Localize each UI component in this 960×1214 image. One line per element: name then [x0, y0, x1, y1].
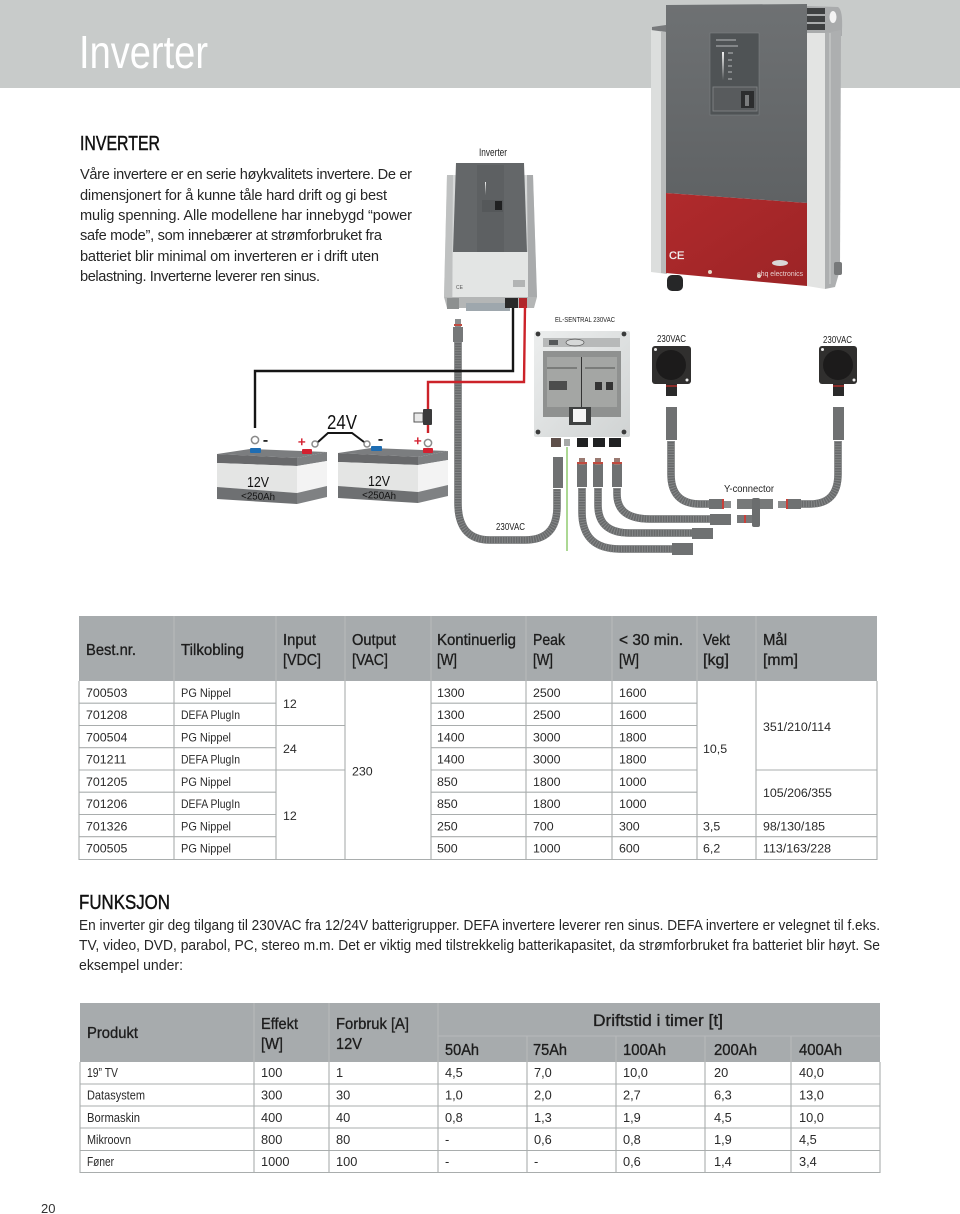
table values: 1800	[533, 797, 561, 811]
socket left	[652, 333, 691, 396]
table values: -	[445, 1154, 449, 1169]
header labels: Output	[352, 632, 397, 649]
header labels: [W]	[437, 652, 457, 669]
header labels: Best.nr.	[86, 642, 136, 659]
table values: 4,5	[714, 1110, 732, 1125]
socket right	[819, 334, 857, 396]
table values: 10,0	[799, 1110, 824, 1125]
table values: PG Nippel	[181, 820, 231, 834]
table values: 80	[336, 1132, 350, 1147]
table values: 100	[336, 1154, 357, 1169]
brand name: ehq electronics	[757, 269, 803, 278]
table values: 1800	[533, 775, 561, 789]
table values: 20	[714, 1065, 728, 1080]
table values: 400	[261, 1110, 282, 1125]
heading: INVERTER: INVERTER	[80, 133, 160, 155]
cable gland	[667, 275, 683, 291]
table values: 30	[336, 1088, 350, 1102]
table values: 600	[619, 842, 640, 856]
table values: 230	[352, 764, 373, 778]
header labels	[86, 631, 798, 669]
title: Inverter	[79, 26, 208, 78]
table values: 2500	[533, 686, 561, 700]
battery 1: -	[263, 432, 268, 449]
grid lines	[80, 1003, 880, 1173]
table values: 300	[261, 1088, 282, 1102]
header labels: Input	[283, 632, 317, 649]
vent grille	[807, 8, 825, 30]
label: 230VAC cable: 230VAC	[496, 521, 525, 533]
function text: En inverter gir deg tilgang til 230VAC fra 12/24V batterigrupper. DEFA invertere leverer ren sinus. DEFA invertere er velegnet til f.eks.	[79, 918, 880, 934]
intro text: batteriet blir minimal om inverteren er i drift uten	[80, 249, 379, 265]
intro text: dimensjonert for å kunne tåle hard drift og gi best	[80, 188, 387, 204]
header labels: Mål	[763, 631, 787, 649]
table values: DEFA PlugIn	[181, 797, 240, 811]
table values: 4,5	[799, 1132, 817, 1147]
table values: 24	[283, 742, 297, 756]
table values: -	[445, 1132, 449, 1147]
table values: 2,0	[534, 1088, 552, 1102]
table values: Mikroovn	[87, 1132, 131, 1147]
table values: Datasystem	[87, 1088, 145, 1102]
table values: 19” TV	[87, 1065, 118, 1080]
switch box	[713, 87, 757, 111]
grid lines	[79, 616, 877, 860]
table values: 0,6	[623, 1154, 641, 1169]
header labels: Kontinuerlig	[437, 632, 516, 649]
left rail	[651, 30, 667, 274]
table values: 1800	[619, 730, 647, 744]
table values: 13,0	[799, 1088, 824, 1102]
header labels: 100Ah	[623, 1042, 666, 1059]
table values: 700504	[86, 730, 127, 744]
table values: 6,3	[714, 1088, 732, 1102]
table values: 1300	[437, 686, 465, 700]
table: runtime examples	[80, 1003, 880, 1173]
intro text: Våre invertere er en serie høykvalitets invertere. De er	[80, 167, 412, 183]
table values: 105/206/355	[763, 786, 832, 800]
header labels: 400Ah	[799, 1042, 842, 1059]
table values: 1600	[619, 686, 647, 700]
socket right: 230VAC	[823, 334, 852, 346]
table values: 850	[437, 797, 458, 811]
three output cables	[577, 458, 731, 555]
table header	[79, 616, 877, 681]
header labels: [mm]	[763, 652, 798, 669]
label: 24V: 24V	[327, 412, 358, 434]
intro text	[80, 167, 412, 285]
header labels: Tilkobling	[181, 642, 244, 659]
header labels: Vekt	[703, 632, 730, 649]
table values: Bormaskin	[87, 1110, 140, 1125]
table values: DEFA PlugIn	[181, 753, 240, 767]
brand oval	[772, 260, 788, 266]
table values: 700503	[86, 686, 127, 700]
header labels: 200Ah	[714, 1042, 757, 1059]
table values: 250	[437, 820, 458, 834]
table values: 701211	[86, 753, 127, 767]
gauge lines	[716, 40, 738, 79]
red wire	[428, 306, 525, 433]
table values: 701208	[86, 708, 127, 722]
distribution box	[534, 331, 630, 447]
header labels: Produkt	[87, 1025, 139, 1042]
table values: 100	[261, 1065, 282, 1080]
table values: 3000	[533, 753, 561, 767]
black wire	[255, 308, 513, 428]
header labels: [W]	[619, 652, 639, 669]
table values: 1600	[619, 708, 647, 722]
table values: 10,5	[703, 742, 727, 756]
table values: 0,8	[623, 1132, 641, 1147]
table values: 351/210/114	[763, 720, 831, 734]
foot	[834, 262, 842, 275]
table values: -	[534, 1154, 538, 1169]
CE mark: CE	[669, 250, 684, 262]
battery 2: <250Ah	[362, 490, 396, 502]
header labels: < 30 min.	[619, 632, 683, 649]
battery 1: +	[298, 434, 306, 449]
table values: 700505	[86, 842, 127, 856]
label: EL-SENTRAL: EL-SENTRAL 230VAC	[555, 315, 615, 324]
table values	[86, 686, 832, 856]
table header	[80, 1003, 880, 1062]
function text: eksempel under:	[79, 958, 183, 974]
table values: 1000	[261, 1154, 289, 1169]
fuse holder	[414, 409, 432, 425]
table values: 4,5	[445, 1065, 463, 1080]
table values: 1000	[533, 842, 561, 856]
battery 1: <250Ah	[241, 491, 275, 503]
table values: 701206	[86, 797, 127, 811]
header labels: [VAC]	[352, 652, 388, 669]
table values: 7,0	[534, 1065, 552, 1080]
small inverter: CE	[456, 285, 464, 291]
battery 2: -	[378, 431, 383, 448]
table values: 0,6	[534, 1132, 552, 1147]
table values	[87, 1065, 824, 1169]
battery 2: 12V	[368, 473, 390, 490]
header labels: [W]	[533, 652, 553, 669]
red lower panel	[666, 193, 807, 286]
control label panel	[710, 33, 759, 115]
table values: 300	[619, 820, 640, 834]
header labels: Effekt	[261, 1016, 298, 1033]
label: Y-connector: Y-connector	[724, 484, 775, 495]
table values: 1000	[619, 775, 647, 789]
table values: 0,8	[445, 1110, 463, 1125]
table values: 1400	[437, 753, 465, 767]
table values: 1400	[437, 730, 465, 744]
header labels: [W]	[261, 1036, 283, 1053]
battery 2: +	[414, 433, 422, 448]
header labels: [VDC]	[283, 652, 321, 669]
table values: 800	[261, 1132, 282, 1147]
battery 1	[217, 432, 327, 504]
table values: 3,4	[799, 1154, 817, 1169]
socket cables and Y-connector	[666, 407, 844, 527]
header labels: Driftstid i timer [t]	[593, 1011, 723, 1030]
table values: DEFA PlugIn	[181, 708, 240, 722]
table values: 1000	[619, 797, 647, 811]
table values: 12	[283, 697, 297, 711]
table values: 1,9	[623, 1110, 641, 1125]
battery 1: 12V	[247, 474, 269, 491]
header band	[0, 0, 960, 88]
table values: Føner	[87, 1154, 115, 1169]
screws	[708, 270, 712, 274]
table values: 2,7	[623, 1088, 641, 1102]
intro text: safe mode”, som innebærer at strømforbruket fra	[80, 228, 383, 244]
label: Inverter: Inverter	[479, 147, 507, 159]
heading: FUNKSJON: FUNKSJON	[79, 892, 170, 914]
grey front panel	[666, 4, 807, 203]
table values: 1,0	[445, 1088, 463, 1102]
table values: 700	[533, 820, 554, 834]
header labels: 75Ah	[533, 1042, 567, 1059]
table values: 1300	[437, 708, 465, 722]
table: inverter models	[79, 616, 877, 860]
table values: 500	[437, 842, 458, 856]
table values: PG Nippel	[181, 842, 231, 856]
earth wire	[566, 447, 568, 551]
socket left: 230VAC	[657, 333, 686, 345]
table values: 3000	[533, 730, 561, 744]
table values: 40,0	[799, 1065, 824, 1080]
table values: 12	[283, 809, 297, 823]
table values: 1	[336, 1065, 343, 1080]
keyhole	[830, 11, 836, 23]
table values: 3,5	[703, 820, 720, 834]
top lip and mounting bracket	[652, 25, 666, 34]
header labels: Forbruk [A]	[336, 1016, 409, 1033]
header labels: 50Ah	[445, 1042, 479, 1059]
header labels: 12V	[336, 1036, 362, 1053]
function text: TV, video, DVD, parabol, PC, stereo m.m. Det er viktig med tilstrekkelig batterikapasitet, da strømforbruket fra batteriet blir høyt. Se	[79, 938, 880, 954]
table values: 1,9	[714, 1132, 732, 1147]
wiring diagram	[217, 147, 857, 555]
table values: 850	[437, 775, 458, 789]
table values: PG Nippel	[181, 730, 231, 744]
intro text: mulig spenning. Alle modellene har innebygd “power	[80, 208, 412, 224]
table values: 113/163/228	[763, 842, 831, 856]
battery 2	[338, 431, 448, 503]
table values: 1,3	[534, 1110, 552, 1125]
table values: 40	[336, 1110, 350, 1125]
function text	[79, 918, 880, 974]
header labels: Peak	[533, 632, 566, 649]
right rail	[807, 33, 825, 289]
photo: large inverter	[651, 4, 842, 291]
table values: PG Nippel	[181, 775, 231, 789]
table values: 701326	[86, 820, 127, 834]
table values: PG Nippel	[181, 686, 231, 700]
table values: 6,2	[703, 842, 720, 856]
intro text: belastning. Inverterne leverer ren sinus.	[80, 269, 320, 285]
ring terminals and jumper	[251, 433, 432, 447]
table values: 1,4	[714, 1154, 732, 1169]
header labels	[87, 1011, 842, 1059]
table values: 2500	[533, 708, 561, 722]
switch	[741, 91, 754, 108]
gauge	[722, 52, 724, 80]
table values: 1800	[619, 753, 647, 767]
table values: 98/130/185	[763, 820, 825, 834]
small inverter	[444, 163, 537, 311]
table values: 701205	[86, 775, 127, 789]
main 230VAC corrugated cable	[453, 319, 563, 540]
table values: 10,0	[623, 1065, 648, 1080]
header labels: [kg]	[703, 652, 729, 669]
